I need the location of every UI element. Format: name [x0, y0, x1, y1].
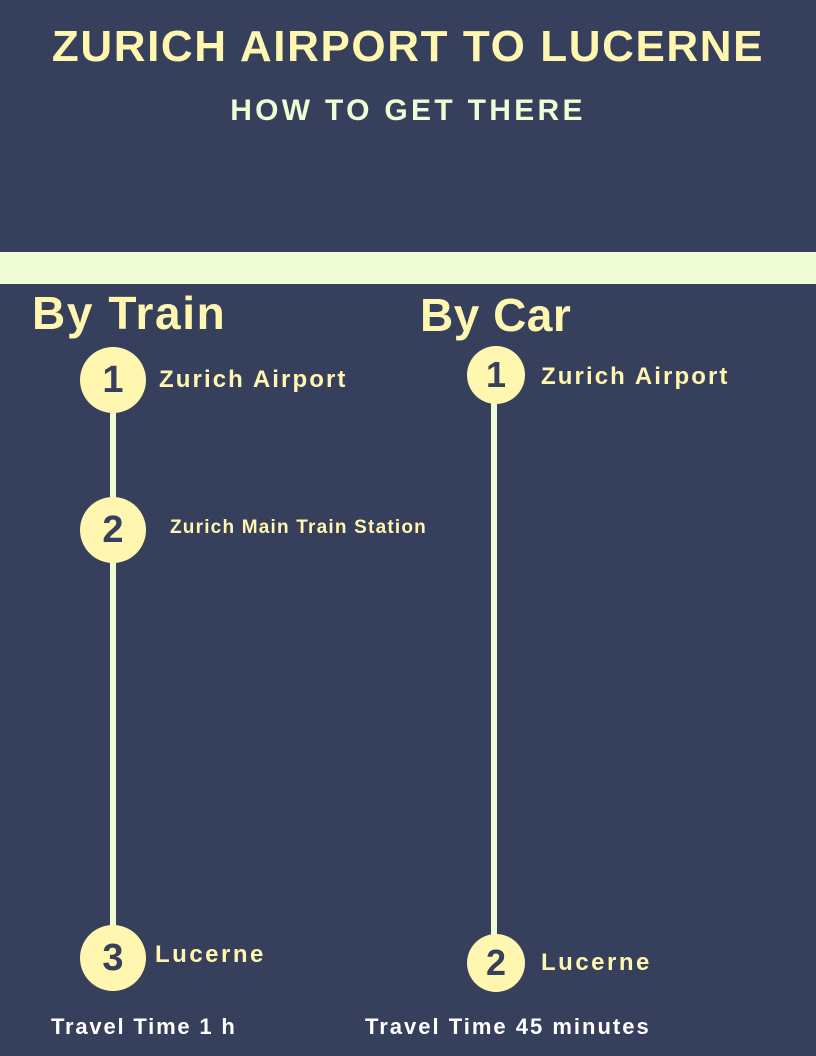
train stop 1: 1	[102, 359, 124, 401]
label car 1: Zurich Airport	[541, 363, 730, 390]
train stop 1	[80, 347, 146, 413]
subtitle: HOW TO GET THERE	[230, 94, 586, 127]
train stop 2: 2	[102, 509, 124, 551]
car line	[491, 375, 497, 963]
train stop 3	[80, 925, 146, 991]
train stop 2	[80, 497, 146, 563]
heading: by train: By Train	[32, 287, 226, 339]
label train 2: Zurich Main Train Station	[170, 517, 427, 538]
travel time car: Travel Time 45 minutes	[365, 1014, 651, 1039]
title: ZURICH AIRPORT TO LUCERNE	[52, 22, 764, 71]
car stop 1: 1	[486, 354, 506, 395]
travel time train: Travel Time 1 h	[51, 1014, 237, 1039]
car stop 1	[467, 346, 525, 404]
train line	[110, 380, 116, 958]
band	[0, 252, 816, 284]
label car 2: Lucerne	[541, 949, 652, 976]
label train 1: Zurich Airport	[159, 366, 348, 393]
train stop 3: 3	[102, 937, 124, 979]
label train 3: Lucerne	[155, 941, 266, 968]
car stop 2: 2	[486, 942, 506, 983]
car stop 2	[467, 934, 525, 992]
heading: by car: By Car	[420, 289, 571, 341]
